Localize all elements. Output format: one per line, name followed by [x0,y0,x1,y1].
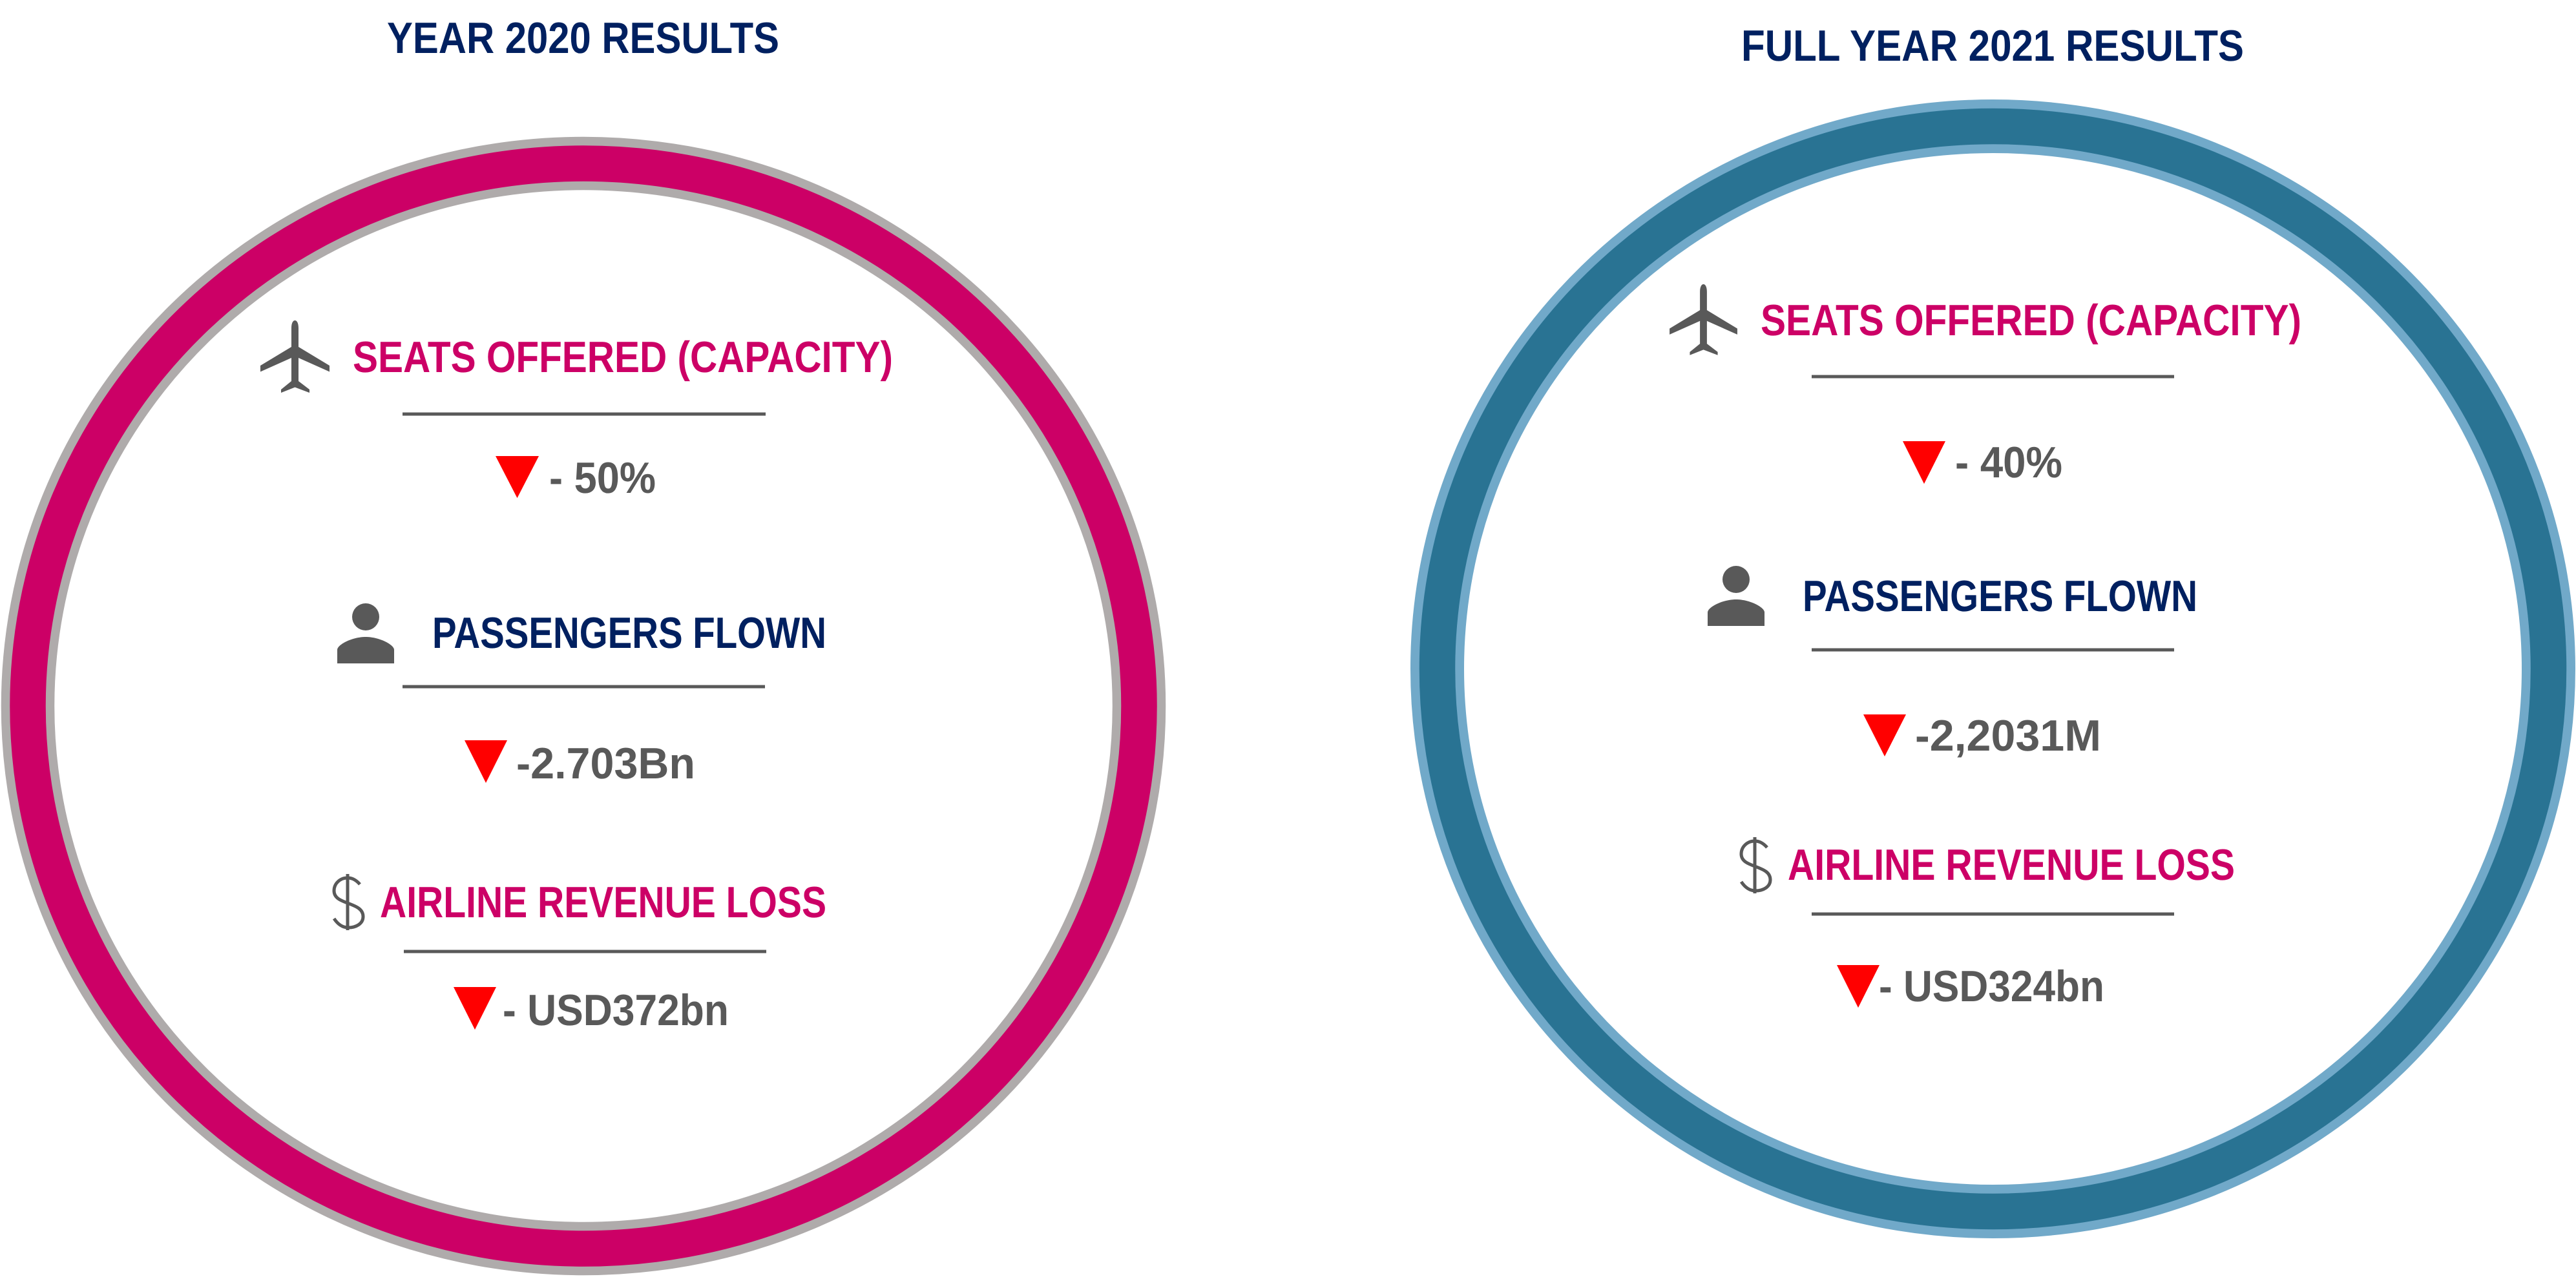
metric: airline revenue loss 2020 [334,874,826,1035]
title: full year 2021 results: FULL YEAR 2021 RESULTS [1741,21,2244,70]
icon: person [1708,566,1764,626]
title: year 2020 results: YEAR 2020 RESULTS [387,14,779,63]
metric: airline revenue loss 2021 [1741,837,2235,1011]
metric: seats offered 2020 [260,320,893,503]
value: seats change: - 50% [549,453,656,503]
icon: down triangle [454,987,496,1030]
ring: 2020 magenta circle [28,163,1139,1249]
icon: down triangle [1837,965,1880,1008]
panel: full year 2021 results [1437,21,2548,1212]
value: passengers change: -2.703Bn [516,739,695,788]
metric: passengers flown 2021 [1708,566,2197,760]
value: seats change: - 40% [1955,438,2062,487]
panel: year 2020 results [28,14,1139,1249]
metric: seats offered 2021 [1670,284,2301,487]
value: passengers change: -2,2031M [1915,711,2101,760]
icon: down triangle [1863,714,1906,756]
icon: down triangle [496,456,539,498]
heading: airline revenue loss: AIRLINE REVENUE LOSS [1788,840,2235,889]
value: revenue loss: - USD372bn [503,986,729,1035]
icon: dollar [334,874,363,930]
value: revenue loss: - USD324bn [1879,962,2104,1011]
ring: 2021 teal circle [1437,127,2548,1212]
icon: person [337,603,394,663]
heading: passengers flown: PASSENGERS FLOWN [432,608,826,658]
icon: down triangle [1903,441,1945,484]
icon: airplane [1670,284,1737,355]
heading: seats offered: SEATS OFFERED (CAPACITY) [353,333,893,382]
icon: down triangle [465,740,507,783]
heading: seats offered: SEATS OFFERED (CAPACITY) [1761,296,2301,345]
heading: airline revenue loss: AIRLINE REVENUE LOSS [380,878,826,927]
heading: passengers flown: PASSENGERS FLOWN [1803,572,2197,621]
metric: passengers flown 2020 [337,603,826,788]
icon: airplane [260,320,330,393]
icon: dollar [1741,837,1770,893]
